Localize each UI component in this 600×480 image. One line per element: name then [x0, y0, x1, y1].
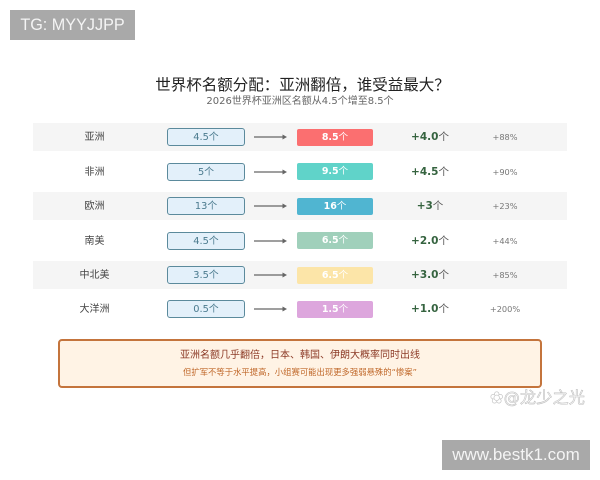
new quota [297, 300, 373, 318]
old quota [167, 197, 245, 215]
percent: +90% [492, 166, 518, 176]
percent: +23% [492, 201, 518, 211]
percent: +200% [490, 304, 520, 314]
increase: +3.0个 [411, 269, 449, 281]
old quota [167, 128, 245, 146]
callout note: 但扩军不等于水平提高，小组赛可能出现更多强弱悬殊的“惨案” [183, 366, 417, 376]
region name: 亚洲 [84, 132, 104, 143]
row: 亚洲 [33, 123, 567, 151]
row: 南美 [84, 232, 518, 250]
increase: +3个 [417, 200, 443, 212]
badge: website: www.bestk1.com [452, 445, 580, 464]
title: 世界杯名额分配：亚洲翻倍，谁受益最大？ [155, 76, 450, 94]
new quota [297, 128, 373, 146]
row: 中北美 [33, 261, 567, 289]
arrow [254, 238, 287, 244]
new quota [297, 163, 373, 180]
old quota: 5个 [198, 166, 214, 178]
badge: TG: TG: MYYJJPP [20, 16, 125, 34]
arrow [254, 306, 287, 312]
arrow [254, 272, 287, 278]
new quota: 6.5个 [322, 270, 348, 280]
badge: TG [10, 10, 135, 40]
increase: +2.0个 [411, 234, 449, 246]
old quota [167, 232, 245, 250]
old quota [167, 300, 245, 318]
arrow [254, 170, 287, 174]
watermark: ✿@龙少之光 [490, 388, 585, 407]
new quota: 1.5个 [322, 304, 348, 314]
region name: 非洲 [84, 166, 104, 178]
row: 欧洲 [33, 192, 567, 220]
arrow [254, 204, 287, 208]
old quota: 4.5个 [193, 236, 219, 246]
region name: 南美 [84, 236, 104, 246]
new quota [297, 266, 373, 284]
old quota [167, 162, 245, 180]
row: 非洲 [84, 163, 518, 181]
new quota: 16个 [324, 200, 346, 212]
callout headline: 亚洲名额几乎翻倍，日本、韩国、伊朗大概率同时出线 [180, 350, 420, 360]
new quota: 8.5个 [322, 132, 348, 142]
region name: 中北美 [80, 270, 110, 281]
badge: website [442, 440, 590, 470]
new quota [297, 232, 373, 249]
increase: +4.5个 [411, 166, 449, 178]
percent: +44% [492, 236, 518, 246]
old quota: 4.5个 [193, 132, 219, 143]
increase: +1.0个 [411, 303, 449, 315]
new quota [297, 198, 373, 214]
old quota: 13个 [195, 201, 217, 212]
percent: +88% [492, 132, 518, 142]
old quota: 3.5个 [193, 270, 219, 281]
arrow [254, 134, 287, 140]
new quota: 9.5个 [322, 166, 348, 177]
percent: +85% [492, 270, 518, 280]
old quota [167, 266, 245, 284]
row: 大洋洲 [80, 300, 520, 318]
region name: 欧洲 [84, 201, 104, 212]
old quota: 0.5个 [193, 304, 219, 315]
new quota: 6.5个 [322, 235, 348, 246]
callout [58, 339, 542, 388]
subtitle: 2026世界杯亚洲区名额从4.5个增至8.5个 [206, 96, 394, 107]
region name: 大洋洲 [80, 304, 110, 315]
increase: +4.0个 [411, 131, 449, 143]
